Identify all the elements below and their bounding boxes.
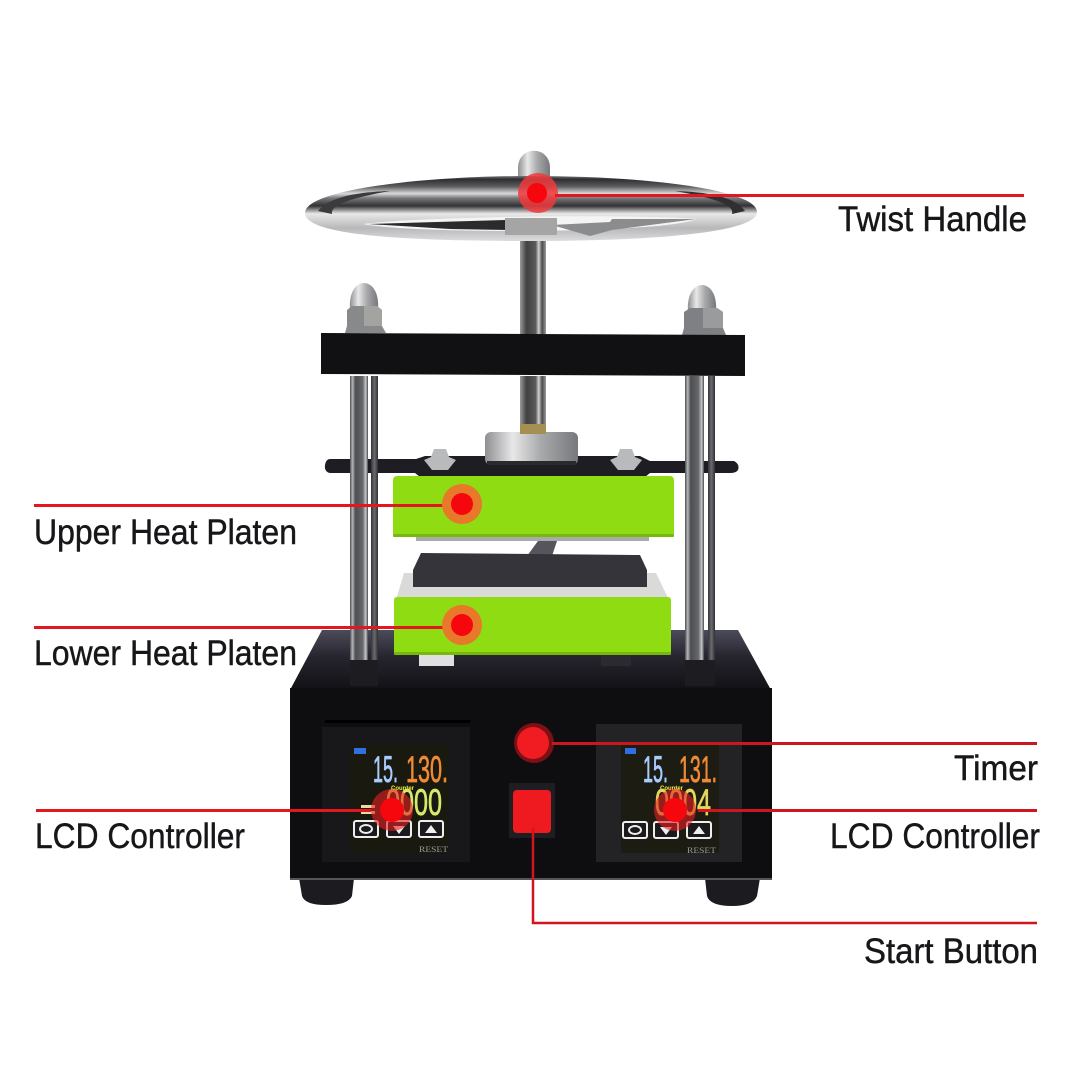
left LCD controller: 130.: [406, 749, 448, 790]
base top: [290, 630, 771, 690]
right LCD controller: 15.: [643, 749, 668, 790]
upper heat platen: [393, 476, 674, 541]
right LCD controller: 0004: [655, 782, 711, 823]
plate bolts: [424, 449, 642, 470]
start button: [509, 783, 555, 838]
top crossbar: [321, 333, 745, 376]
left LCD controller: RESET: [419, 844, 449, 854]
lower heat platen: [394, 597, 671, 655]
connector strap: [527, 541, 557, 556]
twist handle wheel: [305, 176, 757, 241]
acorn nuts: [345, 283, 726, 335]
timer indicator: [514, 723, 554, 763]
callout: lower heat platen: [34, 605, 482, 673]
threaded screw: [520, 230, 546, 434]
right LCD controller: 131.: [679, 749, 717, 790]
callout: upper heat platen: [34, 484, 482, 552]
feet: [299, 878, 760, 906]
callout: start button: Start Button: [864, 932, 1038, 971]
callout: timer: [552, 742, 1038, 788]
base front: [290, 688, 772, 880]
callout: upper heat platen: Upper Heat Platen: [34, 513, 297, 552]
black heating pad: [413, 553, 647, 587]
callout: twist handle: [518, 173, 1027, 239]
callout: left LCD controller: [35, 789, 413, 856]
lower silver plate: [396, 573, 669, 600]
left and right rods: [350, 376, 715, 686]
right LCD controller: Counter: [660, 786, 684, 792]
callout: right LCD controller: LCD Controller: [830, 817, 1040, 856]
press illustration: [290, 151, 772, 906]
left LCD controller: [322, 720, 470, 862]
pressure washer: [485, 424, 578, 465]
left LCD controller: 15.: [373, 749, 398, 790]
callout: twist handle: Twist Handle: [838, 200, 1027, 239]
callout: start button: [533, 828, 1038, 971]
handle knob: [518, 151, 550, 180]
left LCD controller: 0000: [386, 782, 442, 823]
callout: timer: Timer: [954, 749, 1038, 788]
bolts under lower platen: [419, 652, 631, 666]
moving plate: [325, 456, 738, 477]
right LCD controller: [596, 724, 742, 862]
callout: left LCD controller: LCD Controller: [35, 817, 245, 856]
left LCD controller: Counter: [391, 786, 415, 792]
callout: right LCD controller: [654, 789, 1040, 856]
right LCD controller: RESET: [687, 845, 717, 855]
callout: lower heat platen: Lower Heat Platen: [34, 634, 297, 673]
